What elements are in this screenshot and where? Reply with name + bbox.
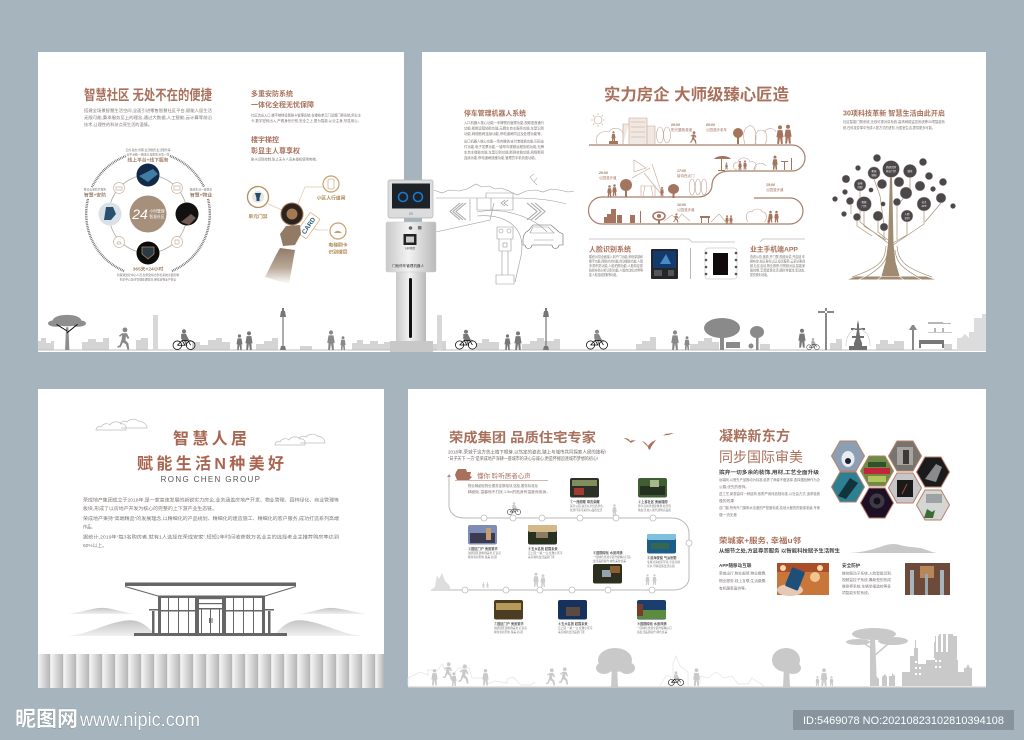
street silhouettes left — [38, 308, 404, 350]
icon: sun — [591, 113, 605, 127]
parking heading: 停车管理机器人系统 — [464, 108, 526, 118]
tech tree: 楼栋 — [907, 169, 913, 173]
ring labels: 到企中心及时管理处理情况,保家庭物业产安全 — [120, 278, 177, 282]
tech tree: 面部识别 — [886, 165, 896, 169]
parking text: 功能,视频远程协助功能,无牌车自主服务功能,车型识别 — [464, 126, 545, 130]
face recognition system: 多重布防功能,人脸拍照功能,人脸特征抓 — [589, 263, 644, 268]
materials text: 送工艺,新提高将一种结构,依附严用待品档标准,以社会方式,追求极致 — [719, 491, 821, 496]
parking text: 入口机器人核心功能一车牌预约管理功能,视频语音通行 — [464, 120, 545, 125]
elevator heading: 楼宇梯控 — [251, 135, 279, 144]
watermark id — [793, 710, 1014, 730]
access labels: 小区人行道闸 — [317, 194, 346, 202]
face recognition system: 辆布控,在区身份认证,投诉服务,云家访客视 — [750, 258, 806, 264]
materials text: 做的效果 — [719, 498, 735, 503]
security text — [251, 112, 362, 123]
owner app text: 业主手机端APP — [750, 244, 798, 254]
icon: birds — [624, 433, 674, 450]
photo captions: 一园绿色景观全面升级精心打 — [637, 626, 672, 630]
small icons — [114, 182, 182, 248]
photo captions: ⑨园圃绿化 水景风情 — [637, 621, 667, 626]
tech tree — [832, 154, 956, 280]
access control graphic: CARD — [301, 216, 318, 236]
intro text — [448, 448, 606, 462]
panel: strength developer — [422, 52, 986, 352]
security heading: 多重安防系统 — [251, 89, 293, 98]
company text — [83, 496, 339, 548]
photo captions: 一园绿色景观全面升级精心打造 — [593, 555, 631, 559]
intro text: 搭建全场景智慧生活空间,全面引进零售智慧社区平台,赋能人居生活 — [84, 107, 212, 114]
tech tree: 识别 — [904, 216, 910, 220]
service heading: 荣城家+服务, 幸福u邻 — [719, 536, 802, 545]
time route title: 实力房企 大师级臻心匠造 — [604, 85, 789, 104]
route time labels: 公园漫步道 — [599, 175, 617, 180]
ring labels: 云平台统一线线息,帮助生活第一体 — [127, 152, 170, 156]
photo captions — [468, 499, 680, 634]
photo captions: 造生活品质提升,绿色优美 — [637, 630, 668, 634]
listening text: 物业精细化物业服务定期培训,巡检,服务标准化 — [468, 483, 538, 488]
security text: 卡,数字密码出入,严看身份识别,安全之上,更为智能,从业主身,尽显用心。 — [251, 118, 361, 123]
watermark logo: www.nipic.com — [79, 710, 200, 731]
heading: new oriental — [719, 428, 803, 465]
hub: 小时管理 — [149, 208, 165, 214]
security block: 像测界系统,车辆举报监控等多 — [842, 584, 891, 588]
company text: 荣成地产集团成立于2018年,是一家高速发展的新锐实力房企,业务涵盖房地产开发、物业管理、园林绿化、商业管理等 — [83, 496, 339, 504]
tech tree heading: 30项科技革新 智慧生活由此开启 — [843, 108, 945, 118]
materials text: 做一流无差 — [719, 512, 738, 517]
route time labels: 接待西点门 — [677, 173, 695, 178]
access labels — [248, 194, 348, 256]
clouds — [96, 419, 325, 445]
listening text: 精细化,温馨而不打扰,1.5m的贴身有温度而用身。 — [468, 489, 550, 494]
route illustrations — [591, 113, 776, 222]
parking text: 功能,网络断网连续功能,停电道闸同且及处理功能等。 — [464, 131, 544, 136]
access labels: 电梯刷卡 — [328, 242, 348, 248]
access labels: 识别楼层 — [328, 248, 348, 256]
life route line — [588, 145, 805, 224]
building — [125, 582, 296, 636]
ring labels — [84, 148, 212, 282]
route time labels: 公园漫步道 — [677, 207, 695, 212]
parking robot kiosk — [386, 180, 436, 352]
parking robot kiosk: 门就停车管理机器人 — [392, 263, 425, 268]
circular diagram — [84, 148, 212, 282]
parking text: 连续功能,停电道闸放缓功能,管理员手机收费功能。 — [464, 155, 538, 160]
intro text: 技术,让理性的科技点亮生活的温情。 — [84, 121, 152, 128]
app block: APP随移动互联 — [719, 562, 752, 569]
ring labels: 线上平台+线下服务 — [127, 156, 169, 164]
title: 赋能生活N种美好 — [137, 454, 284, 473]
security block: 项智能安防系统。 — [842, 590, 872, 595]
photo captions: ⑤滨海视窗 气派别墅 — [647, 555, 677, 560]
watermark logo: 昵图网 — [15, 708, 78, 731]
photo captions: 来高端新生活品质门区 — [528, 555, 555, 559]
photo captions: ⑥园圃绿化 水景风情 — [593, 550, 623, 555]
ring labels: 整合云安防产服务 — [84, 188, 106, 192]
face recognition system: 查看公告,缴费,开门禁,视频对讲,开启锁,车 — [750, 254, 805, 259]
route time labels: 08:00 — [706, 123, 715, 127]
parking robot kiosk: (≡) — [409, 212, 413, 216]
title — [137, 429, 284, 473]
tech tree text: 社区智能门禁系统,无线可视对讲系统,高清网络监控系统等30项智能系 — [843, 119, 946, 124]
service subheading: 从细节之处,方显尊崇服务 以智能科技赋予生活新生 — [719, 548, 840, 554]
photo captions: 来高端新生活品质门区 — [558, 630, 585, 634]
security heading: 一体化全程无忧保障 — [251, 100, 314, 109]
photo captions: 云上园,一路,一山,优雅小区带 — [528, 551, 563, 555]
title: 智慧人居 — [173, 429, 247, 448]
elevator heading: 彰显主人尊享权 — [251, 146, 300, 155]
photo captions: 情生活,融入现代建筑高品质 — [638, 508, 671, 512]
photo captions: ③园区门户 美景繁华 — [468, 546, 498, 551]
panel: smart living — [38, 389, 384, 688]
face recognition system: 人脸识别系统 — [589, 244, 631, 254]
route time labels: 20:00 — [598, 171, 608, 175]
tech tree: APP — [921, 205, 927, 208]
photo captions: ①一席阁暖 尊贵荣耀 — [570, 499, 600, 504]
photo captions: ⑧五大名苑 超围未来 — [558, 621, 588, 626]
timeline photos — [468, 478, 676, 620]
route time labels: 10:00 — [677, 203, 686, 207]
app block — [719, 562, 829, 596]
tech tree: 感知 — [871, 173, 877, 177]
photo captions: 优质环境带来舒心品质生活 — [570, 508, 603, 512]
parking robot kiosk: 扫码缴费 — [405, 246, 415, 250]
security photo — [905, 563, 950, 595]
face recognition system: 提供便利功能。 — [750, 272, 770, 277]
ring labels: 365天×24小时 — [133, 266, 163, 272]
tech tree: 控制 — [857, 185, 863, 189]
face recognition system: 楼栋对讲全面接入到户门功能,系统单部和 — [589, 254, 643, 259]
materials text — [719, 477, 821, 517]
face recognition system: 楼宇功能,视频对讲功能,自动播放功能,人脸 — [589, 258, 644, 264]
subheading: 摈弃一切多余的装饰,用材,工艺全面升级 — [719, 469, 819, 476]
tech tree: 人脸 — [904, 212, 910, 216]
photo captions: 围绕园区建筑群美景,打造高 — [494, 626, 527, 630]
app block: 物业服务,线上互联,生活缴费, — [719, 578, 766, 583]
listening text — [468, 483, 550, 494]
hexagon details — [838, 447, 942, 518]
elevator heading — [251, 135, 300, 155]
hub — [130, 196, 166, 232]
striped base — [38, 654, 384, 688]
company text: 板块,形成了以房地产开发为核心的完整的上下游产业生态链。 — [83, 505, 217, 512]
tech tree: 业主 — [921, 200, 927, 204]
tech tree: 智能 — [861, 200, 867, 204]
access labels: 单元门禁 — [248, 213, 268, 220]
parking line drawing — [434, 174, 574, 284]
face recognition system — [589, 239, 806, 279]
hub: 智慧社区 — [149, 214, 165, 219]
face recognition system: 拍和布防分析识别功能,人脸自动化对带等 — [589, 268, 644, 272]
security block — [842, 562, 950, 595]
subtitle: RONG CHEN GROUP — [161, 475, 261, 484]
hub: 24 — [131, 206, 148, 222]
photo captions: 专属滨海社区环境,享受高端 — [647, 560, 680, 564]
route time labels: 15:00 — [766, 183, 775, 187]
hills — [68, 608, 366, 636]
panel: quality housing — [408, 389, 986, 688]
photo captions: 端住宅新形象,集美,商,居 — [494, 630, 523, 634]
listening heading — [455, 469, 548, 480]
parking text: 付功能,电子发票功能,一键呼叫视频远程协助功能,无牌 — [464, 144, 545, 149]
company text: 60%以上。 — [83, 542, 107, 548]
title: 荣成集团 品质住宅专家 — [449, 430, 596, 445]
photo captions: 云上园,一路,一山,优雅小区带 — [558, 626, 593, 630]
ring labels: 智慧+安防 — [84, 192, 106, 198]
face recognition system: 居控制,享受智慧生活,随时掌握生活动态, — [750, 268, 805, 272]
access control graphic — [248, 176, 348, 284]
photo captions: 围绕园区建筑群美景,打造高 — [468, 551, 501, 555]
tech tree: 门禁 — [861, 204, 867, 208]
hexagon photos — [832, 441, 950, 520]
app photo — [777, 563, 829, 596]
face recognition system: 频,社区活动,物业报修,可视频对话,智能家 — [750, 263, 806, 268]
photo captions: ⑦园区门户 美景繁华 — [494, 621, 524, 626]
distant hill — [850, 544, 937, 553]
parking text — [464, 120, 545, 160]
title: smart community: 智慧社区 无处不在的便捷 — [84, 87, 212, 103]
route time labels: 17:00 — [677, 169, 686, 173]
parking text: 车自主缴费功能,车型识别功能,断网收费功能,网络断网 — [464, 150, 545, 154]
photo captions: ④五大名苑 超围未来 — [528, 546, 558, 551]
street silhouettes lower — [408, 624, 986, 688]
node photos — [98, 164, 198, 264]
security block: 视频监控子系统,最新型的热成 — [842, 577, 891, 582]
intro text — [84, 107, 212, 128]
ring labels: 智慧+物业 — [190, 192, 212, 198]
route time labels — [598, 123, 784, 212]
timeline path — [431, 474, 692, 593]
photo captions: 端住宅新形象,集美,商,居 — [468, 555, 497, 559]
app block: 有机跟菜直供等。 — [719, 586, 748, 590]
face recognition system: 能,人脸连续提取等功能。 — [589, 272, 619, 277]
photo captions: 亲水,尽情度假生活氛围 — [647, 564, 675, 568]
route time labels: 公园漫步道 — [766, 187, 784, 192]
watermark logo — [15, 708, 200, 731]
route time labels: 阳光晨跑漫道 — [671, 127, 692, 132]
tech tree: 开启门禁 — [886, 169, 896, 173]
route time labels: 06:00 — [671, 123, 680, 127]
company text: 荣成地产秉持“高端精品”的发展理念,以精细化的产品规划、精细化的建造施工、精细化的客户服务,成功打造系列高端 — [83, 515, 339, 522]
heading: new oriental: 同步国际审美 — [719, 449, 803, 465]
intro text: “日子天下 一方”是荣成地产深耕一座城市的决心与诚心,更是怀揣追逐城市梦想的初心! — [448, 455, 598, 462]
heading: new oriental: 凝粹新东方 — [719, 428, 790, 444]
elevator text: 刷卡识别控制,防止无卡人员未授权使用电梯。 — [251, 156, 319, 162]
street silhouettes right — [422, 308, 986, 350]
photo captions: 荣享公园,森活共享优质景色, — [570, 504, 604, 508]
company text: 据统计,2019年“每3名购房者,就有1人选择在荣成安家”,短短2年时间收获数万名业主的选择老业主推荐购房率达到 — [83, 534, 339, 540]
photo captions: 尊享高尚景观建筑群,社区风 — [638, 504, 671, 508]
listening heading: 懂你 聆听居者心声 — [477, 471, 531, 480]
security text: 社区流出入口,楼宇梯梯设置刷卡管理系统,在楼栋单元门设置门禁系统,用业主 — [251, 112, 362, 118]
security block: 楼控联动子系统,人脸智能识别, — [842, 570, 892, 576]
ring labels: 融资生活一键联合 — [190, 188, 212, 192]
parking text: 出口机器人核心功能一场内微信/支付宝缴费功能,扫码支 — [464, 138, 545, 144]
route time labels: 公园漫步老年 — [706, 127, 727, 132]
ring labels: 云办,政办,管理,生活缴费,生活服务等 — [125, 148, 171, 152]
security block: 安全防护 — [842, 562, 861, 569]
materials text: 自门窗,所有外门窗和水法度的严密度标准,实地大都的的窗保老级,专家 — [719, 505, 821, 510]
tech tree text: 统,在科技变革中完成人居方式的进阶,为居室生活,提供更多可能。 — [843, 125, 935, 130]
intro text: 2018年,荣城于这方热土植下根芽,以笃定的姿态,踏上与城市共同探索人居的旅程! — [448, 448, 606, 456]
face device — [651, 249, 678, 279]
tech tree: 云端 — [857, 181, 863, 185]
photo captions: ②上善社区 美丽楼阁 — [638, 499, 668, 504]
security heading — [251, 89, 314, 109]
photo captions: 生活品质提升,绿色美化优美 — [593, 559, 626, 563]
company text: 作品。 — [83, 524, 95, 530]
materials text: 公路,优先的首饰。 — [719, 484, 749, 489]
app block: 荣城出行,物业报修,物业缴费, — [719, 570, 766, 576]
ring labels: 新保通监控中心人员,智能化综合防控系统全面控制 — [117, 273, 179, 277]
materials text: 远端网,以首先产品推动为标准,临界了两者不做选择,选择摆品牌作为办 — [719, 477, 821, 482]
intro text: 无限可能,秉承服务至上的理念,通过大数据,人工智能,云计算等前沿 — [84, 114, 212, 121]
phone app diagram — [705, 248, 737, 279]
watermark id: ID:5469078 NO:20210823102810394108 — [803, 715, 1004, 727]
panel: smart community — [38, 52, 404, 352]
tech tree: 家居 — [871, 169, 877, 173]
tech tree text — [843, 119, 946, 130]
